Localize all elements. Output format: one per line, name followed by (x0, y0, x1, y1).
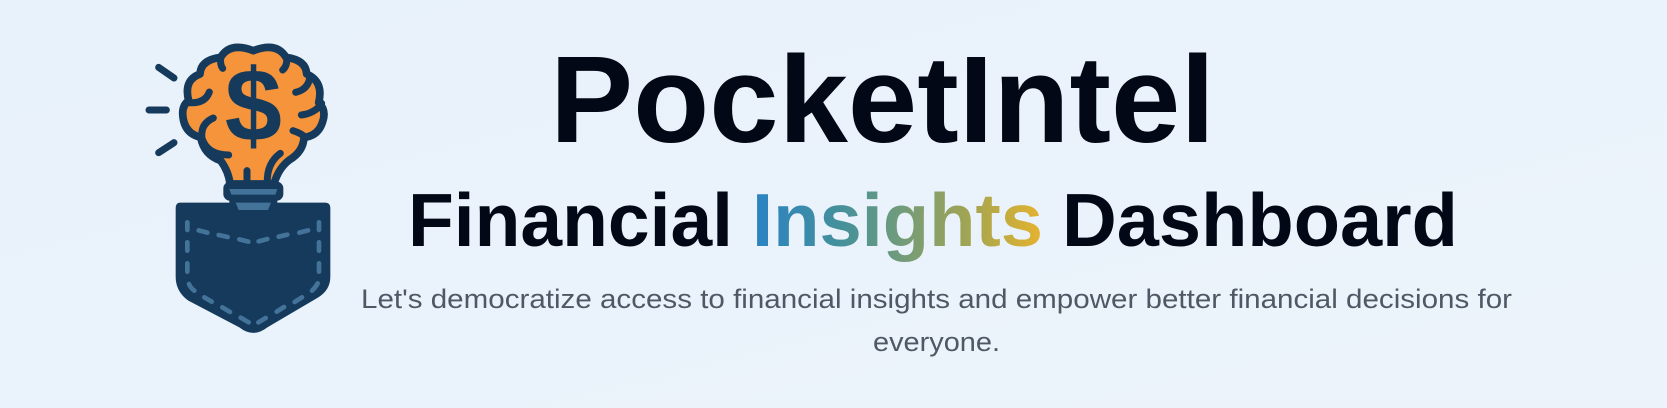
icon: bulb socket (223, 182, 283, 210)
subtitle word: Insights: Insights (752, 178, 1043, 262)
icon: brain bulb (149, 47, 324, 210)
tagline line 1: Let's democratize access to financial insights and empower better financial decisions for (361, 284, 1512, 314)
tagline (361, 284, 1512, 357)
subtitle word: Dashboard: Dashboard (1062, 178, 1458, 262)
tagline line 2: everyone. (873, 327, 1000, 357)
icon: dollar sign: $ (225, 48, 282, 163)
subtitle (408, 178, 1458, 262)
logo: brain bulb in pocket (149, 47, 330, 333)
subtitle word: Financial: Financial (408, 178, 733, 262)
title: PocketIntel (550, 32, 1215, 169)
icon: pocket (176, 203, 330, 333)
